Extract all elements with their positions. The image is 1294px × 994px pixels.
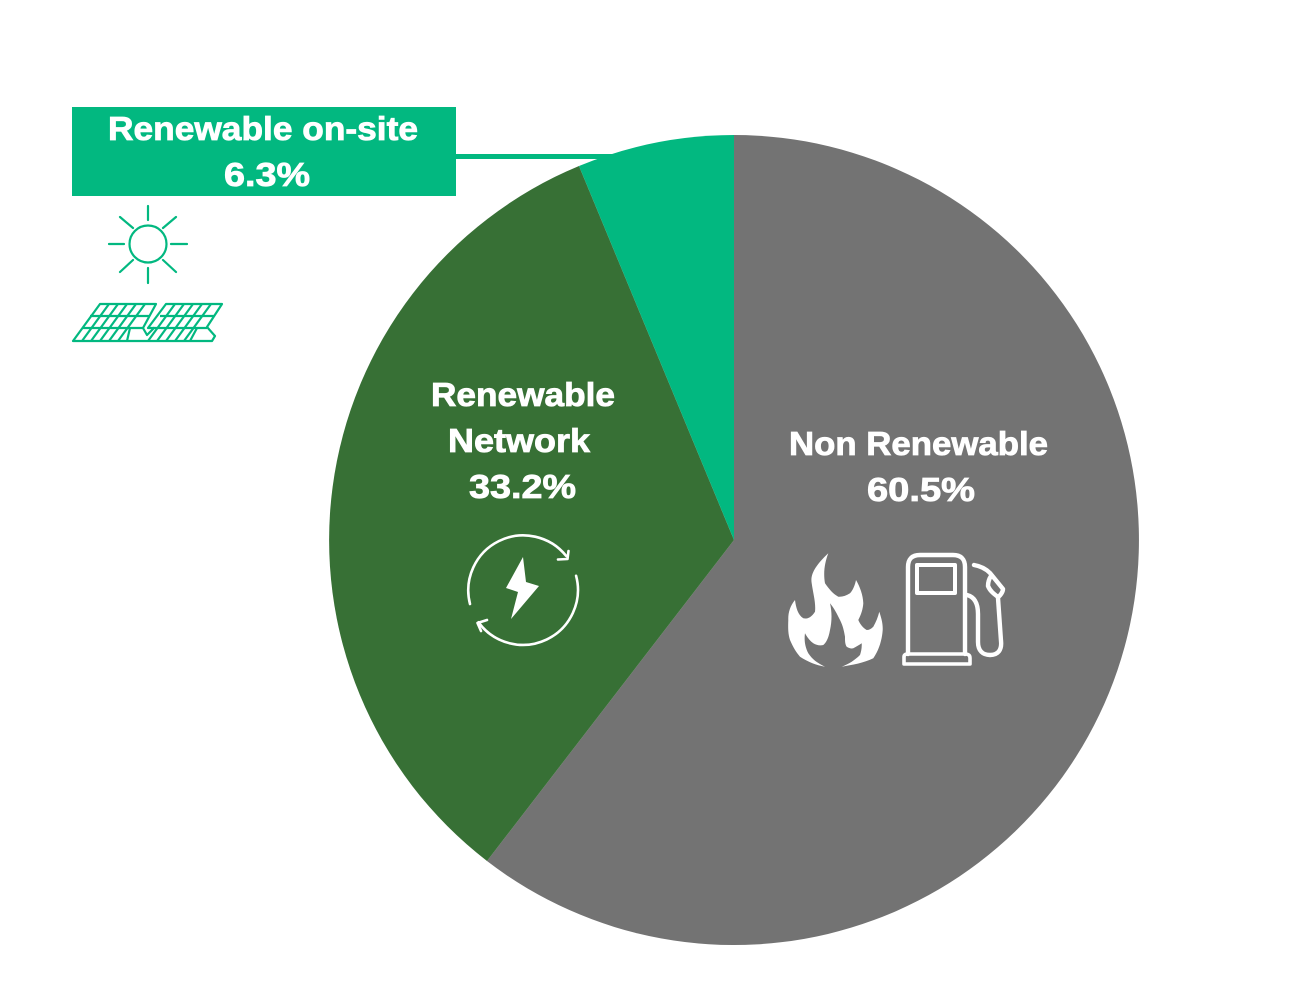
pie chart <box>329 135 1139 945</box>
lightning bolt <box>506 557 539 619</box>
label: renewable network <box>431 376 615 505</box>
label line one: Non Renewable <box>789 425 1048 462</box>
icon: fuel pump <box>904 555 1003 664</box>
label: non renewable <box>789 425 1048 508</box>
pump window <box>917 565 955 593</box>
icon: flame <box>788 553 883 667</box>
slice: non renewable 60.5% <box>487 135 1139 945</box>
label value: 33.2% <box>469 468 576 505</box>
slice: renewable on-site 6.3% <box>579 135 734 540</box>
callout: renewable on-site <box>72 107 456 196</box>
label line two: Network <box>448 422 591 459</box>
callout value: 6.3% <box>224 156 310 193</box>
callout leader line <box>455 154 615 159</box>
icon: sun <box>109 206 187 283</box>
fuel nozzle <box>974 565 1003 597</box>
callout label: Renewable on-site <box>108 110 418 147</box>
pump body <box>908 555 965 654</box>
icon: solar panels <box>73 304 222 341</box>
callout box <box>72 107 456 196</box>
label line one: Renewable <box>431 376 615 413</box>
pump base <box>904 654 970 664</box>
icon: renewable electricity cycle <box>468 535 578 645</box>
label value: 60.5% <box>867 471 975 508</box>
fuel hose <box>967 595 1001 655</box>
slice: renewable network 33.2% <box>329 166 734 861</box>
